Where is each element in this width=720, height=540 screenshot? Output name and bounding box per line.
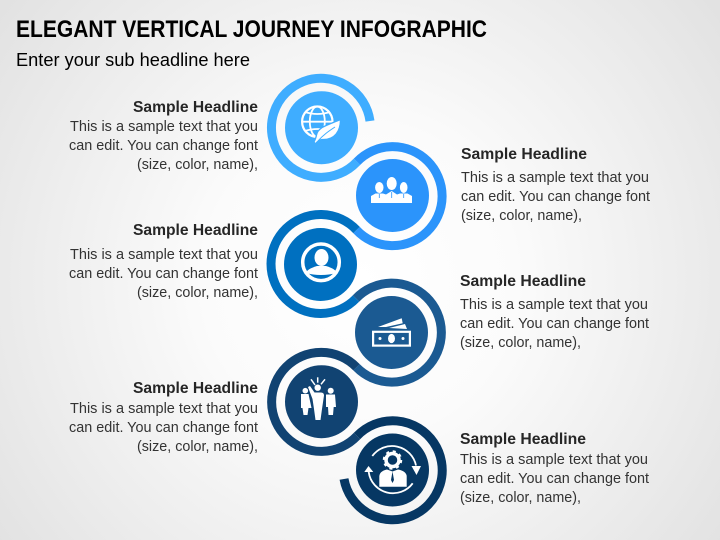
text block 1: This is a sample text that you [70,119,258,135]
text block 3 [69,222,258,301]
journey ring 4 [356,283,441,382]
text block 5 [69,380,258,455]
text block 4: Sample Headline [460,273,586,290]
icon: banknotes [373,318,410,346]
icon: person in a circle [303,244,339,281]
journey ring 3 [271,214,356,313]
subtitle: Enter your sub headline here [16,50,250,70]
text block 3: (size, color, name), [137,285,258,301]
step 1 node: globe and leaf [285,91,358,164]
step 2 node: team [356,159,429,232]
text block 3: Sample Headline [133,222,258,239]
step 4 node: money [355,296,428,369]
text block 1: (size, color, name), [137,157,258,173]
icon: globe with leaf [302,106,340,144]
step 6 node: process [356,434,429,506]
icon: group with raised hand [301,377,336,420]
journey ring 1 [271,78,370,177]
text block 6: Sample Headline [460,431,586,448]
text block 4: can edit. You can change font [460,316,649,332]
icon: three business people [371,177,412,203]
step 5 node: leader [285,365,358,438]
text block 6: can edit. You can change font [460,471,649,487]
text block 5: This is a sample text that you [70,401,258,417]
text block 5: Sample Headline [133,380,258,397]
title: ELEGANT VERTICAL JOURNEY INFOGRAPHIC [16,16,487,43]
text block 1: can edit. You can change font [69,138,258,154]
text block 2: This is a sample text that you [461,170,649,186]
text block 5: can edit. You can change font [69,420,258,436]
journey ring 5 [272,352,357,451]
text block 2 [461,146,650,224]
journey ring 6 [344,421,442,520]
icon: person with gear and cycle arrows [364,446,421,493]
text block 1: Sample Headline [133,99,258,116]
text block 3: This is a sample text that you [70,247,258,263]
text block 4: This is a sample text that you [460,297,648,313]
text block 4 [460,273,649,351]
text block 4: (size, color, name), [460,335,581,351]
text block 3: can edit. You can change font [69,266,258,282]
step 3 node: profile [284,228,357,301]
text block 2: Sample Headline [461,146,587,163]
text block 6: (size, color, name), [460,490,581,506]
journey ring 2 [356,147,442,246]
text block 2: can edit. You can change font [461,189,650,205]
text block 6 [460,431,649,506]
text block 6: This is a sample text that you [460,452,648,468]
text block 5: (size, color, name), [137,439,258,455]
text block 1 [69,99,258,173]
text block 2: (size, color, name), [461,208,582,224]
